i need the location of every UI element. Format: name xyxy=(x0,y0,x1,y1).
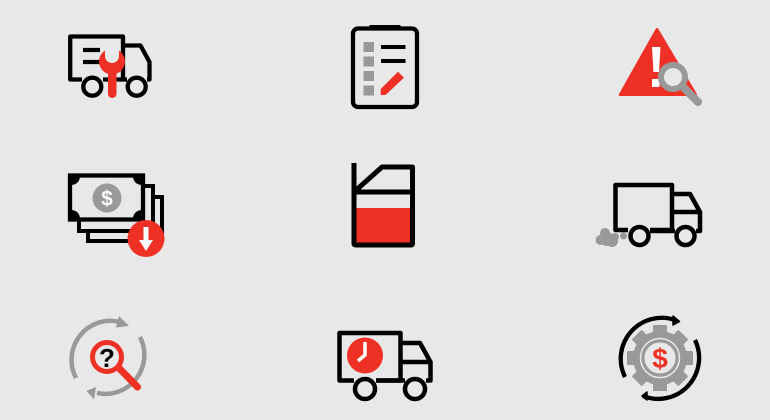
icon: falling money: $ xyxy=(101,188,113,210)
icon: truck with clock xyxy=(340,333,430,399)
icon: fuel tank xyxy=(354,163,412,245)
icon: warning triangle with magnifier xyxy=(619,28,698,102)
icon: gear with dollar and cycle arrows xyxy=(621,316,699,400)
icon: clipboard checklist xyxy=(353,25,417,107)
icon: question magnifier with cycle arrows xyxy=(72,316,144,400)
icon: gear with dollar and cycle arrows: $ xyxy=(652,343,668,374)
icon: truck with exhaust xyxy=(596,185,700,247)
icon: truck with wrench xyxy=(70,36,150,98)
icon: falling money xyxy=(70,176,164,257)
icon: question magnifier with cycle arrows: ? xyxy=(99,343,115,373)
